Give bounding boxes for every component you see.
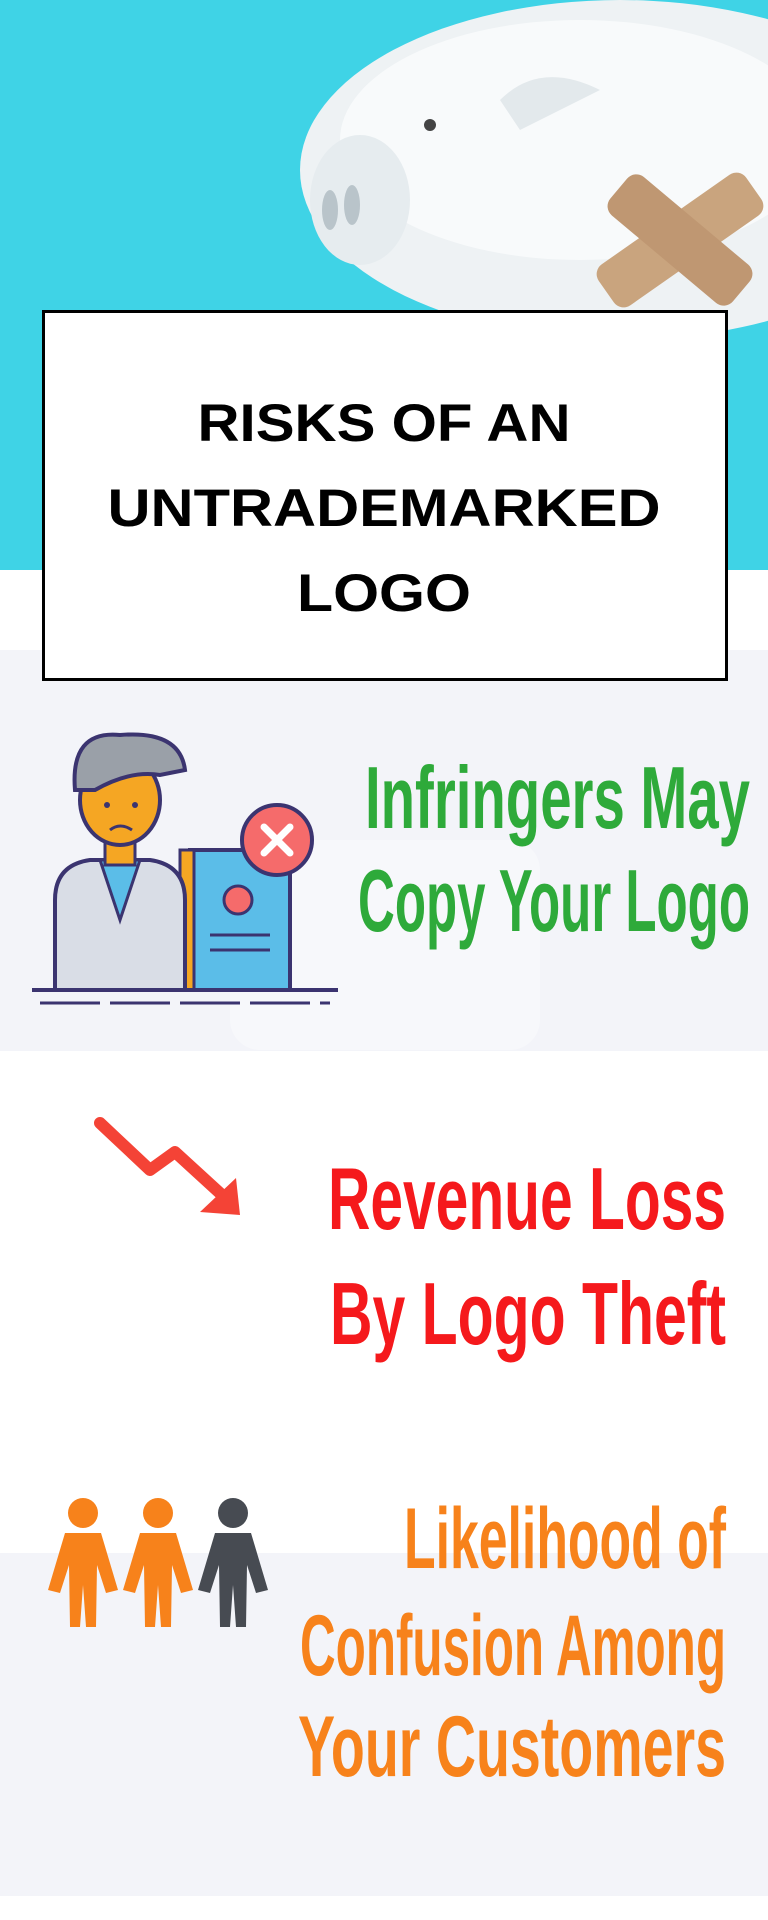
title box: LOGO (297, 564, 471, 623)
arrow: red downward trend (100, 1123, 240, 1215)
heading: infringers (358, 748, 750, 950)
heading: revenue loss (328, 1149, 726, 1363)
background top cyan (0, 0, 768, 570)
heading: confusion (298, 1491, 726, 1795)
icon: people (48, 1498, 268, 1627)
title box (44, 312, 726, 680)
piggy bank (300, 0, 768, 340)
title box: RISKS OF AN (198, 394, 570, 453)
faint background shape (230, 840, 540, 1050)
title box: UNTRADEMARKED (108, 479, 660, 538)
icon: man with rejected document (32, 734, 338, 1003)
